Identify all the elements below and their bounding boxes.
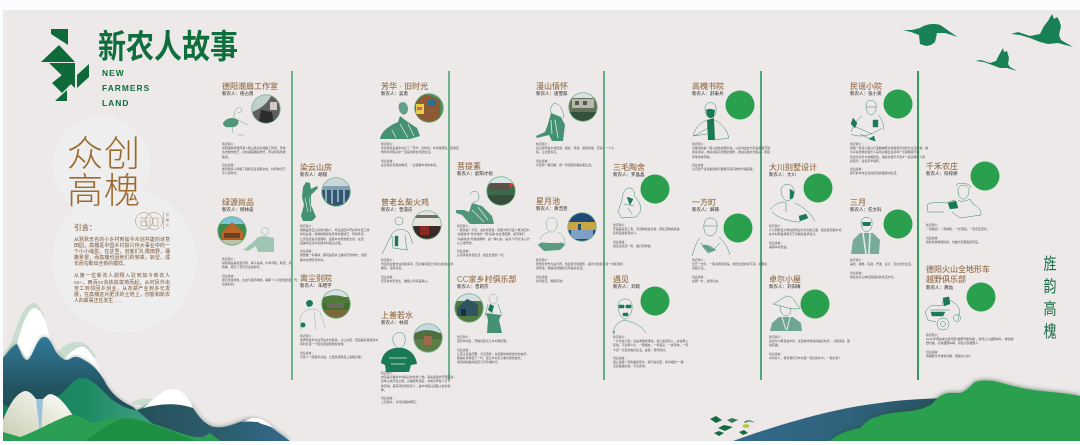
- description: 用越野方式体验高槐，把握向上的！: [926, 354, 972, 358]
- photo: [568, 213, 596, 241]
- heading: 越野俱乐部: [926, 275, 966, 284]
- heading: 三毛陶舍: [613, 163, 645, 172]
- logo: tangram bird: [41, 29, 89, 101]
- panel: 高槐书院: [692, 82, 770, 171]
- icon: stamp: 众: [166, 223, 169, 227]
- figure sketch: [223, 108, 248, 135]
- person: 新农人：朱缙学: [300, 283, 332, 288]
- description: "菩提素食"作为他的一颗"菩提"在这里结果，如同他们: [457, 232, 525, 236]
- person: 新农人：欧阳才松: [457, 171, 493, 176]
- person: 新农人：林润: [381, 320, 408, 325]
- description: 创业感言：: [926, 236, 940, 240]
- panel: 千禾农庄: [926, 162, 1000, 244]
- icon: cranes: [903, 14, 1073, 71]
- heading: 芳华 · 旧时光: [381, 82, 428, 91]
- person: 新农人：杨占勇: [222, 91, 254, 96]
- description: 新农简介：: [613, 335, 627, 339]
- description: 餐馆，深受喜爱。: [381, 266, 404, 270]
- description: 新农简介：: [381, 142, 395, 146]
- description: 创业感言：: [222, 274, 236, 278]
- vertical text: 旌韵高槐: 旌 韵 高 槐: [1043, 251, 1056, 342]
- description: [457, 224, 532, 257]
- description: 仰望星空，脚踏实地！: [536, 279, 565, 283]
- description: 新农简介：: [926, 223, 940, 227]
- description: 与自然一路同路，用一份温暖的美好和生活。: [536, 163, 594, 167]
- heading: 染云山房: [300, 163, 332, 172]
- description: 创业感言：: [769, 241, 783, 245]
- photo: [455, 294, 483, 322]
- photo placeholder: [640, 174, 670, 204]
- heading: [926, 265, 990, 284]
- description: [536, 258, 623, 283]
- description: 创业感言：: [850, 271, 864, 275]
- description: 朱缙学返乡创业开设乡村民宿，让山水田、田园美好延续到乡，: [300, 338, 381, 342]
- description: 新农简介：: [222, 142, 236, 146]
- description: 民宿。不负那么片，一程相逢，一景美意，一盘风味，一草: [613, 343, 688, 347]
- description: 传承优秀传统。: [692, 155, 712, 159]
- heading: 漫山情怀: [536, 82, 568, 91]
- description: 曾道庆在餐饮业摸爬多年，回高槐养殖土鸡并创办柴火鸡: [381, 262, 453, 266]
- description: 见这些美好者，不负这场。: [613, 364, 648, 368]
- description: 创业感言：: [769, 352, 783, 356]
- description: 新农简介：: [926, 333, 940, 337]
- description: 民谣文化与乡村相结合，用好的音乐与老乡一起演绎与人民: [850, 155, 925, 159]
- description: 创业感言：: [381, 275, 395, 279]
- description: 让染色走进高校课堂，发展乡村旅游和文创，在田: [300, 237, 364, 241]
- person: 新农人：解楠: [692, 207, 719, 212]
- description: 上善若水，水润高槐的明天。: [381, 400, 419, 404]
- photo placeholder: [804, 174, 832, 202]
- description: 吴勇退伍后返乡创立了「芳华 · 旧时光」乡村微酒馆，回收旧: [381, 146, 459, 150]
- panel: 星月池: [536, 197, 623, 283]
- heading: CC家乡村俱乐部: [457, 275, 517, 284]
- description: 新农简介：: [222, 257, 236, 261]
- description: 我想做一件事情，那就是把乡土美好带到城市，也把: [300, 253, 366, 257]
- description: [769, 224, 844, 249]
- description: 好音乐，喜好家乡情怀。: [850, 159, 882, 163]
- description: 美丽乡村建设。: [769, 245, 789, 249]
- panel: 德阳火山全地形车越野俱乐部: [924, 265, 1014, 358]
- description: 林润是高槐村乡村振兴的优秀人物，其夫妻返乡开展民宿，: [381, 375, 456, 379]
- photo: [412, 211, 442, 239]
- figure sketch: [925, 297, 960, 330]
- description: 用生活点亮一份，做只有陶舍。: [613, 244, 653, 248]
- description: 农家食材天然土，做柴火鸡就是用心。: [381, 279, 430, 283]
- heading: 上善若水: [381, 311, 413, 320]
- description: [300, 334, 381, 359]
- figure sketch: [851, 218, 880, 254]
- person: 新农人：舒泰兵: [692, 91, 724, 96]
- heading: 绿源尚品: [222, 198, 254, 207]
- heading: 遇见: [613, 275, 629, 284]
- description: 新农简介：: [536, 142, 550, 146]
- figure sketch: [538, 218, 565, 251]
- figure sketch: [851, 100, 884, 141]
- description: [926, 333, 1013, 358]
- description: 让孩子走进田野，亲近自然，在农耕中体验成长的快乐，: [457, 352, 529, 356]
- description: [300, 224, 370, 262]
- photo: [414, 324, 442, 352]
- person: 新农人：大川: [769, 172, 796, 177]
- description: 十道一点近的美好生活，是他，有你真好。: [613, 348, 668, 352]
- description: 创业感言：: [300, 351, 314, 355]
- heading: 高槐书院: [692, 82, 724, 91]
- panel: 漫山情怀: [536, 82, 614, 167]
- description: 间园子见。: [692, 266, 706, 270]
- person: 新农人：任文科: [850, 207, 882, 212]
- description: [222, 142, 286, 175]
- heading: 千禾农庄: [926, 162, 958, 171]
- description: 创业感言：: [381, 159, 395, 163]
- icon: crane bottom: [975, 48, 1017, 71]
- photo placeholder: [726, 90, 754, 120]
- figure sketch: [485, 294, 502, 333]
- description: 创业感言：: [692, 163, 706, 167]
- description: 德阳潮扇非遗传承人杨占勇创办潮扇工作室，传承: [222, 146, 286, 150]
- panel: 大川别墅设计: [769, 163, 844, 249]
- heading: 众创高槐: [67, 125, 141, 214]
- panel: 芳华·旧时光: [380, 82, 459, 167]
- description: 用好的食物喂好的，也做大家都爱的农庄。: [926, 240, 981, 244]
- subtitle: NEW FARMERS LAND: FARMERS: [102, 83, 150, 93]
- panel: 三毛陶舍: [613, 163, 680, 248]
- description: 好传递给更多的人。: [613, 231, 639, 235]
- description: 来卓尔小屋走进乡村，这里城市繁荣的美好时光，川民情深，更: [769, 339, 850, 343]
- description: 黄浩哲曾作为设计师，热爱旅行和摄影，返乡创建星月池一处民宿和: [536, 262, 623, 266]
- panel: 三月: [850, 198, 914, 279]
- description: 绿源尚品是新型农场，种子采摘、牛羊养殖、栽培、养: [222, 261, 291, 265]
- figure sketch: [536, 104, 565, 141]
- heading: 曾老幺柴火鸡: [381, 198, 429, 207]
- description: 美食、播放、民宿、开发、设计、农业文化生活。: [850, 262, 914, 266]
- description: 希望更多人能够了解和喜爱潮扇文化，将传统手艺: [222, 167, 286, 171]
- panel: 曾老幺柴火鸡: [381, 198, 454, 283]
- description: [381, 258, 454, 283]
- description: 创业感言：: [381, 396, 395, 400]
- person: 新农人：罗晶晶: [613, 172, 644, 177]
- description: 园美学生活中实践乡村振兴之路。: [300, 241, 343, 245]
- description: 的圣地。其获评优秀新农人，是乡村振兴道路上的好榜: [381, 384, 450, 388]
- description: 创业感言：: [536, 159, 550, 163]
- figure sketch: [380, 102, 420, 139]
- description: 新农简介：: [769, 224, 783, 228]
- figure sketch: [770, 184, 815, 222]
- photo: [218, 217, 246, 246]
- panel: 遇见: [612, 275, 688, 368]
- panel: 菩提素: [456, 162, 532, 257]
- description: 创业感言：: [300, 249, 314, 253]
- description: 新农简介：: [692, 258, 706, 262]
- description: 在这里好养殖的物流，一直保留乡村的本色。: [381, 163, 439, 167]
- description: 野乐趣，高效越野车辆，带给大家越野人。: [926, 341, 981, 345]
- panel: 上善若水: [381, 311, 456, 404]
- subtitle: NEW FARMERS LAND: [102, 68, 150, 108]
- heading: 德阳潮扇工作室: [222, 82, 278, 91]
- illustration: right hills: [710, 376, 1080, 441]
- description: 与众多优秀的音乐人来到高槐生活共鸣广泛领略音乐和: [850, 150, 919, 154]
- figure sketch: [770, 296, 802, 331]
- description: 院，让这里有花。: [536, 150, 559, 154]
- description: 创业感言：: [457, 348, 471, 352]
- person: 新农人：张小英: [850, 91, 882, 96]
- description: 新农简介：: [381, 371, 395, 375]
- icon: stamp: [135, 212, 169, 230]
- description: 致富。: [222, 155, 231, 159]
- heading: 一方町: [692, 198, 716, 207]
- photo placeholder: [884, 90, 912, 118]
- panel: 一方町: [692, 198, 767, 283]
- description: [769, 335, 850, 360]
- description: 新农简介：: [692, 142, 706, 146]
- description: 达美好的。: [222, 282, 236, 286]
- description: [381, 371, 456, 404]
- description: 用真诚和美好给孩子们幸福时光。: [457, 360, 500, 364]
- description: 殖等，成为了现代农业的标杆。: [222, 265, 262, 269]
- heading: 星月池: [536, 197, 560, 206]
- photo: [322, 178, 350, 206]
- description: 阅读活动，成就书院高质量的服务，推进高槐文化振兴，积极: [692, 150, 770, 154]
- photo placeholder: [800, 290, 830, 318]
- person: 新农人：胡翔: [300, 172, 327, 177]
- photo: [252, 95, 280, 123]
- description: 认真学素食和生活，热爱这里的一切。: [457, 253, 506, 257]
- figure sketch: [692, 218, 730, 256]
- photo: [487, 177, 515, 205]
- description: 让农民产业和素质教育都能带来同样的幸福感受。: [692, 167, 756, 171]
- heading: 引言: 引言：: [74, 223, 96, 232]
- photo placeholder: [884, 210, 912, 238]
- description: 卓尔甚么，希望我们可乡村里一家好的牛乡。一路打拼！: [769, 356, 841, 360]
- description: [692, 142, 770, 171]
- description: 新农简介：: [613, 223, 627, 227]
- description: 都市文明带到乡村。: [300, 258, 326, 262]
- description: 从土地开始。: [457, 241, 474, 245]
- person: 新农人：杨林皮: [222, 207, 254, 212]
- description: 创业感言：: [613, 240, 627, 244]
- description: [613, 223, 680, 248]
- photo placeholder: [966, 282, 996, 312]
- description: 一户长驻小院，这是游客的驿站，将让来者望入，并在那入: [613, 339, 688, 343]
- heading: 三月: [850, 198, 866, 207]
- description: 大川别墅设计师在建筑设计的创新之路，和这里深耕乡村，: [769, 228, 844, 232]
- person: 新农人：吴勇: [381, 91, 408, 96]
- figure sketch: [618, 188, 641, 218]
- description: [536, 142, 614, 167]
- heading: 大川别墅设计: [769, 163, 817, 172]
- heading: 众创高槐: 高槐: [67, 162, 141, 214]
- description: 创业感言：: [457, 249, 471, 253]
- description: [926, 223, 990, 244]
- icon: scattered leaves: [710, 416, 755, 436]
- icon: crane left: [903, 24, 958, 46]
- photo placeholder: [970, 162, 1000, 190]
- description: 在那一方，找到好友。: [692, 279, 721, 283]
- photo placeholder: [640, 286, 670, 316]
- panel: 离尘别院: [300, 274, 381, 359]
- description: [222, 257, 297, 286]
- panel: 民谣小院: [850, 82, 928, 175]
- description: 同时打造一个集住宿度假的综合体。: [300, 342, 346, 346]
- description: [850, 142, 928, 175]
- description: 我们坚持绿色，生态与循环种植，秉承个人对自然的爱，传: [222, 278, 297, 282]
- person: 新农人：曾道庆: [381, 207, 412, 212]
- description: 愿在这片山林创造美好的生活方式。: [850, 275, 896, 279]
- text block: intro: 从默默无名的小乡村到如今众创共建的诗意田园，高槐是中国乡村振兴伟大事业中的一个小小缩影。在这里，创客们扎根田野，播撒希望，而高槐也因他们的到来，转型、成长而勾勒出全新的模样。 从第一位新农人胡翔入驻到如今新农人58+，两百50余栋栋拔地而起，从村民外出务工到邻回乡创业，从农耕产业到多元发展，在高槐这片肥沃的土地上，创客和新农人的故事正在发生……: [74, 238, 170, 304]
- description: 创业感言：: [536, 275, 550, 279]
- figure sketch: [301, 182, 318, 221]
- description: 一家粮田，一家种植，一方田园，一家农庄培育。: [926, 227, 990, 231]
- description: 一颗菩提一片天，古朴的茶舍，欧阳才松与爱人携手回乡，: [457, 228, 532, 232]
- description: 新农简介：: [457, 335, 471, 339]
- description: 露营地，用美好的相机记录美好生活。: [536, 266, 585, 270]
- description: 新农简介：: [300, 224, 314, 228]
- panel: 德阳潮扇工作室: [222, 82, 286, 175]
- description: 新农简介：: [850, 258, 864, 262]
- description: 新农简介：: [536, 258, 550, 262]
- panel: intro circles: [52, 116, 198, 333]
- description: 加有趣。: [769, 343, 781, 347]
- description: 回到乡村后，开始创建亲子乡村俱乐部。: [457, 339, 509, 343]
- description: 新农简介：: [300, 334, 314, 338]
- description: 高槐书院是一座公益性的图书馆，以读书会友为宗旨积极开展: [692, 146, 770, 150]
- description: 与家人一起携手共进，让更多游客爱上美丽高槐！: [300, 355, 364, 359]
- icon: stamp: 高: [166, 212, 169, 217]
- heading: 德阳火山全地形车: [926, 265, 990, 274]
- heading: 民谣小院: [850, 82, 882, 91]
- panel: 卓尔小屋: [769, 275, 850, 360]
- panel: 染云山房: [300, 163, 370, 262]
- person: 新农人：刘旧梅: [769, 284, 800, 289]
- description: 带入新时代。: [222, 171, 239, 175]
- description: 胡翔是染云山房的创始人，毕业后回乡开办草木染工坊: [300, 228, 369, 232]
- figure sketch: [613, 299, 646, 334]
- description: 新农简介：: [850, 142, 864, 146]
- icon: stamp: 槐: [166, 217, 169, 222]
- description: 创业感言：: [613, 356, 627, 360]
- photo: [568, 93, 598, 122]
- panel: 绿源尚品: [217, 198, 297, 286]
- description: 新农简介：: [769, 335, 783, 339]
- figure sketch: [300, 300, 325, 330]
- figure sketch: [693, 103, 729, 140]
- icon: crane right: [1011, 14, 1073, 47]
- title: 新农人故事: 新农人故事: [98, 21, 238, 69]
- person: 新农人：何梓婷: [926, 171, 958, 176]
- description: 用心追逐一间优美的家乡，我们在这里，每次相约一"遇": [613, 360, 684, 364]
- person: 新农人：唐雪茹: [536, 91, 568, 96]
- figure sketch: [927, 183, 981, 218]
- description: 古法制作技艺，创新潮扇图案样式，带动村民增收: [222, 150, 286, 154]
- figure sketch: [456, 191, 494, 224]
- description: 新农简介：: [457, 224, 471, 228]
- description: 创业感言：: [850, 167, 864, 171]
- description: 把美好传承给下一代，建立乡村亲子教育的新模式，: [457, 356, 523, 360]
- description: 文艺一方町，一座书香的茶馆，依托这里的养不存，如果这: [692, 262, 767, 266]
- description: "菩提素食"所说的那样，是一种心态，是对人们对"身心灵": [457, 237, 530, 241]
- description: [692, 258, 767, 283]
- description: [613, 335, 688, 368]
- person: 新农人：黄浩哲: [536, 206, 568, 211]
- figure sketch: [381, 332, 417, 372]
- heading: 菩提素: [457, 162, 481, 171]
- figure sketch: [243, 228, 274, 252]
- description: [457, 335, 529, 364]
- description: [381, 142, 459, 167]
- description: 创业感言：: [926, 350, 940, 354]
- description: 张曦一民谣小院以打造精神栖息地和音乐创新为生活风格，她: [850, 146, 928, 150]
- description: 新农简介：: [381, 258, 395, 262]
- description: 物到乡村振兴中一直提供着快乐的生活。: [381, 150, 433, 154]
- description: [850, 258, 914, 279]
- description: 2019 年黄灿成立俱乐部"越野驾驶基地"，依托火山越野车队，体验越: [926, 337, 1013, 341]
- description: 四季山水疗愈之旅。高槐别墅酒店，亦成为年轻人打卡: [381, 379, 450, 383]
- description: 的创业者。他用植物染色传承非遗技艺，传授学员，: [300, 232, 366, 236]
- person: 新农人：曾莉莎: [457, 284, 488, 289]
- description: 创业感言：: [692, 275, 706, 279]
- description: 创业感言：: [222, 163, 236, 167]
- description: 我们的乡村生活在民谣的美丽中生活。: [850, 171, 899, 175]
- description: 在乡村风格建筑与艺术融合美学设计。: [769, 232, 818, 236]
- subtitle: NEW FARMERS LAND: NEW: [102, 68, 125, 78]
- person: 新农人：刘政: [613, 284, 640, 289]
- illustration: left mountains: [3, 302, 290, 441]
- heading: 卓尔小屋: [769, 275, 801, 284]
- heading: 众创高槐: 众创: [67, 125, 141, 177]
- figure sketch: [382, 217, 413, 254]
- subtitle: NEW FARMERS LAND: LAND: [102, 98, 129, 108]
- description: 样。: [381, 388, 387, 392]
- photo: [322, 290, 350, 318]
- photo: [415, 94, 443, 122]
- person: 新农人：黄灿: [926, 285, 953, 290]
- description: 唐山情怀是乡村民宿，融合、民宿、露营基地、花海、一个小: [536, 146, 614, 150]
- panel: CC家乡村俱乐部: [454, 275, 529, 364]
- description: 罗晶晶来到三毛，带领陶瓷爱好者，把生活陶瓷的美: [613, 227, 679, 231]
- photo placeholder: [724, 214, 752, 242]
- heading: 离尘别院: [300, 274, 332, 283]
